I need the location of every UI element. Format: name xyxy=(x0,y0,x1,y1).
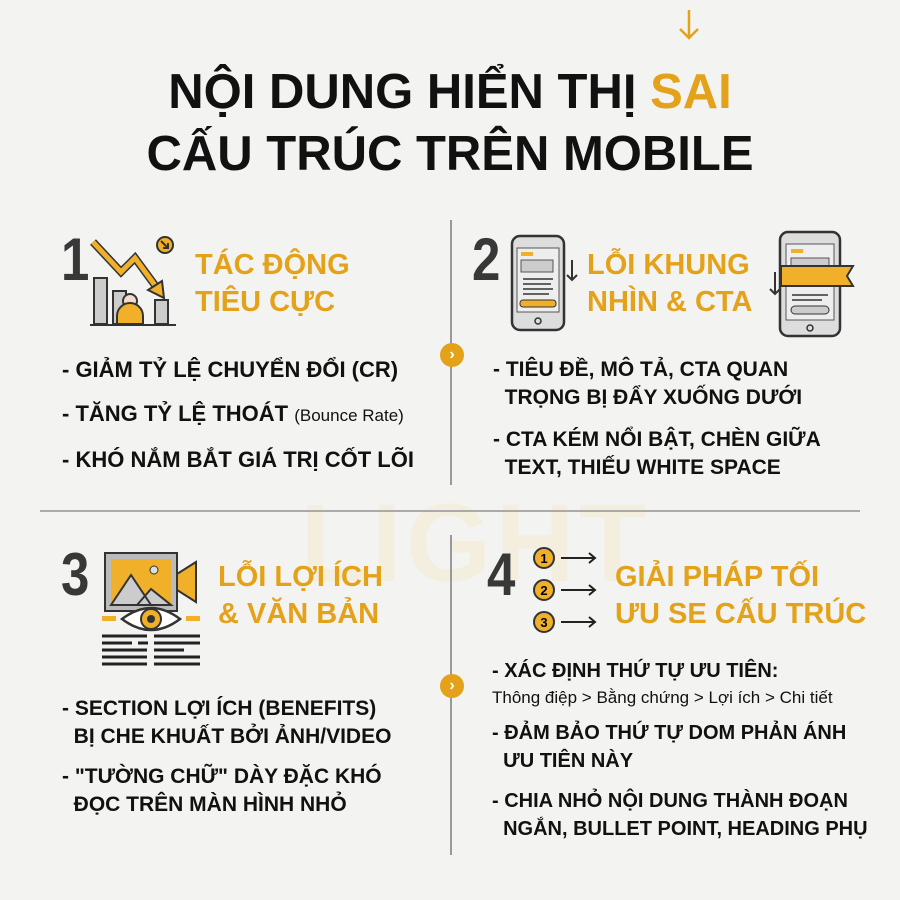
bullets: - ĐẢM BẢO THỨ TỰ DOM PHẢN ÁNH xyxy=(492,722,846,744)
arrow: chevron 2 xyxy=(440,674,464,698)
bullets: - KHÓ NẮM BẮT GIÁ TRỊ CỐT LÕI xyxy=(62,447,414,472)
heading: TIÊU CỰC xyxy=(195,286,335,318)
icon: declining chart xyxy=(90,236,176,326)
heading xyxy=(218,560,383,630)
bullets: TEXT, THIẾU WHITE SPACE xyxy=(505,456,781,479)
icon: phone left xyxy=(510,234,578,332)
bullets: - TĂNG TỶ LỆ THOÁT (Bounce Rate) xyxy=(62,401,404,426)
number 3: 3 xyxy=(61,541,89,608)
icon: numbered steps: 3 xyxy=(540,615,548,630)
bullets: - CHIA NHỎ NỘI DUNG THÀNH ĐOẠN xyxy=(492,790,848,812)
watermark: LIGHT xyxy=(300,482,650,605)
bullets: Thông điệp > Bằng chứng > Lợi ích > Chi tiết xyxy=(492,688,833,707)
bullets: BỊ CHE KHUẤT BỞI ẢNH/VIDEO xyxy=(74,725,391,748)
bullets: TRỌNG BỊ ĐẨY XUỐNG DƯỚI xyxy=(505,386,802,409)
arrow: chevron 1: › xyxy=(449,346,455,363)
number 4: 4 xyxy=(487,541,515,608)
bullets: - CTA KÉM NỔI BẬT, CHÈN GIỮA xyxy=(493,428,821,451)
icon: image video eye text xyxy=(102,552,200,666)
heading: LỖI LỢI ÍCH xyxy=(218,561,383,593)
icon: numbered steps: 1 xyxy=(540,551,548,566)
bullets: - TIÊU ĐỀ, MÔ TẢ, CTA QUAN xyxy=(493,358,788,381)
icon: numbered steps: 2 xyxy=(540,583,548,598)
bullets xyxy=(62,356,414,472)
heading: GIẢI PHÁP TỐI xyxy=(615,561,819,593)
bullets: ĐỌC TRÊN MÀN HÌNH NHỎ xyxy=(74,793,347,816)
arrow: chevron 1 xyxy=(440,343,464,367)
heading: TÁC ĐỘNG xyxy=(195,249,350,281)
bullets: - SECTION LỢI ÍCH (BENEFITS) xyxy=(62,697,376,720)
icon: numbered steps xyxy=(533,547,596,633)
bullets xyxy=(62,696,391,816)
bullets: NGẮN, BULLET POINT, HEADING PHỤ xyxy=(503,818,868,840)
panel: 4 giải pháp xyxy=(487,541,868,840)
arrow: chevron 2: › xyxy=(449,677,455,694)
heading: NHÌN & CTA xyxy=(587,286,752,318)
bullets: - GIẢM TỶ LỆ CHUYỂN ĐỔI (CR) xyxy=(62,357,398,382)
heading xyxy=(587,248,752,318)
panel: 3 lỗi lợi ích xyxy=(61,541,391,816)
heading xyxy=(615,560,866,630)
panel: 1 tác động xyxy=(61,226,414,472)
bullets: - XÁC ĐỊNH THỨ TỰ ƯU TIÊN: xyxy=(492,660,778,682)
title: NỘI DUNG HIỂN THỊ SAI xyxy=(168,65,732,119)
number 1: 1 xyxy=(61,226,89,293)
heading: LỖI KHUNG xyxy=(587,249,750,281)
heading xyxy=(195,248,350,318)
number 2: 2 xyxy=(472,226,500,293)
bullets xyxy=(493,356,821,479)
icon: phone right xyxy=(769,230,855,338)
heading: ƯU SE CẤU TRÚC xyxy=(615,598,866,630)
heading: & VĂN BẢN xyxy=(218,598,379,630)
bullets: ƯU TIÊN NÀY xyxy=(503,750,633,772)
bullets: - "TƯỜNG CHỮ" DÀY ĐẶC KHÓ xyxy=(62,765,382,788)
panel: 2 lỗi khung nhìn xyxy=(472,226,855,479)
bullets xyxy=(492,658,868,840)
title line 2: CẤU TRÚC TRÊN MOBILE xyxy=(146,127,754,181)
icon: arrow above SAI xyxy=(679,10,699,40)
